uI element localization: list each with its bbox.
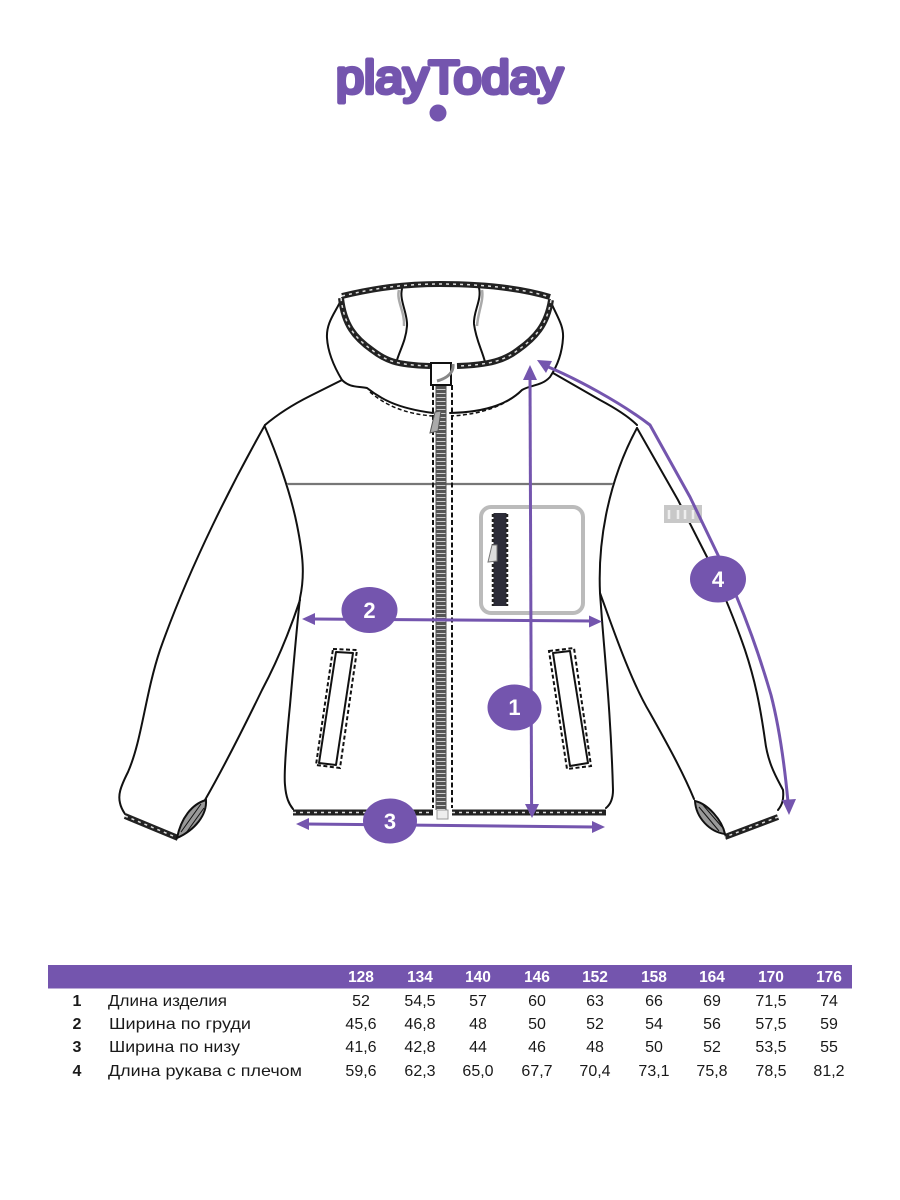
left welt pocket xyxy=(316,649,357,768)
row 4: sleeve length with shoulder: 65,0 xyxy=(462,1063,494,1080)
right cuff xyxy=(695,801,778,837)
row 4: sleeve length with shoulder: 67,7 xyxy=(521,1063,553,1080)
row 4: sleeve length with shoulder: 81,2 xyxy=(813,1063,845,1080)
table header: 128 xyxy=(348,969,374,986)
row 1: garment length: 66 xyxy=(645,993,663,1010)
row 2: chest width xyxy=(73,1016,838,1033)
row 1: garment length xyxy=(73,993,838,1010)
table header: 176 xyxy=(816,969,842,986)
table header: 164 xyxy=(699,969,725,986)
row 2: chest width: 2 xyxy=(73,1016,82,1033)
row 3: hem width xyxy=(73,1039,838,1056)
measurement 2: chest width xyxy=(302,587,602,633)
row 2: chest width: 54 xyxy=(645,1016,663,1033)
row 3: hem width: 42,8 xyxy=(404,1039,436,1056)
row 3: hem width: 52 xyxy=(703,1039,721,1056)
row 2: chest width: 56 xyxy=(703,1016,721,1033)
row 1: garment length: 52 xyxy=(352,993,370,1010)
logo: playToday: playToday xyxy=(336,51,563,103)
right sleeve xyxy=(600,428,783,810)
chest pocket xyxy=(481,507,583,613)
row 1: garment length: 69 xyxy=(703,993,721,1010)
hood xyxy=(327,284,563,416)
row 1: garment length: 63 xyxy=(586,993,604,1010)
row 2: chest width: 57,5 xyxy=(755,1016,787,1033)
left sleeve xyxy=(119,425,300,814)
row 4: sleeve length with shoulder: Длина рукава с плечом xyxy=(108,1063,302,1080)
table header: 146 xyxy=(524,969,550,986)
table header: 152 xyxy=(582,969,608,986)
row 3: hem width: 53,5 xyxy=(755,1039,787,1056)
row 4: sleeve length with shoulder: 4 xyxy=(73,1063,82,1080)
measurement 3: hem width xyxy=(296,798,605,844)
left cuff xyxy=(125,800,206,838)
row 2: chest width: 59 xyxy=(820,1016,838,1033)
row 3: hem width: Ширина по низу xyxy=(109,1039,240,1056)
row 4: sleeve length with shoulder: 78,5 xyxy=(755,1063,787,1080)
row 2: chest width: 48 xyxy=(469,1016,487,1033)
measurement 4: sleeve length: 4 xyxy=(712,567,725,592)
logo: playToday xyxy=(336,51,563,122)
row 3: hem width: 3 xyxy=(73,1039,82,1056)
row 3: hem width: 44 xyxy=(469,1039,487,1056)
measurement 1: garment length: 1 xyxy=(508,695,521,720)
row 2: chest width: 50 xyxy=(528,1016,546,1033)
measurement 1: garment length xyxy=(488,365,542,818)
table header: 158 xyxy=(641,969,667,986)
row 1: garment length: 57 xyxy=(469,993,487,1010)
table header: 140 xyxy=(465,969,491,986)
row 1: garment length: 1 xyxy=(73,993,82,1010)
row 4: sleeve length with shoulder: 75,8 xyxy=(696,1063,728,1080)
row 1: garment length: 71,5 xyxy=(755,993,787,1010)
row 4: sleeve length with shoulder: 62,3 xyxy=(404,1063,436,1080)
table header xyxy=(48,965,852,988)
row 3: hem width: 46 xyxy=(528,1039,546,1056)
measurement 4: sleeve length xyxy=(537,360,796,815)
jacket technical drawing xyxy=(119,284,783,838)
table header: 134 xyxy=(407,969,433,986)
size table xyxy=(48,965,852,1080)
center zipper xyxy=(430,363,453,810)
row 2: chest width: Ширина по груди xyxy=(109,1016,251,1033)
row 3: hem width: 50 xyxy=(645,1039,663,1056)
row 2: chest width: 46,8 xyxy=(404,1016,436,1033)
row 3: hem width: 41,6 xyxy=(345,1039,377,1056)
row 1: garment length: 54,5 xyxy=(404,993,436,1010)
body outline xyxy=(265,373,637,809)
table header: 170 xyxy=(758,969,784,986)
right welt pocket xyxy=(549,648,591,769)
measurement 3: hem width: 3 xyxy=(384,809,396,834)
row 4: sleeve length with shoulder: 73,1 xyxy=(638,1063,670,1080)
row 4: sleeve length with shoulder xyxy=(73,1063,845,1080)
row 2: chest width: 52 xyxy=(586,1016,604,1033)
row 4: sleeve length with shoulder: 70,4 xyxy=(579,1063,611,1080)
row 3: hem width: 55 xyxy=(820,1039,838,1056)
row 1: garment length: 74 xyxy=(820,993,838,1010)
hem xyxy=(293,810,606,819)
row 1: garment length: 60 xyxy=(528,993,546,1010)
measurement 2: chest width: 2 xyxy=(363,598,376,623)
row 2: chest width: 45,6 xyxy=(345,1016,377,1033)
row 3: hem width: 48 xyxy=(586,1039,604,1056)
sleeve tag xyxy=(664,505,702,523)
row 1: garment length: Длина изделия xyxy=(108,993,227,1010)
row 4: sleeve length with shoulder: 59,6 xyxy=(345,1063,377,1080)
